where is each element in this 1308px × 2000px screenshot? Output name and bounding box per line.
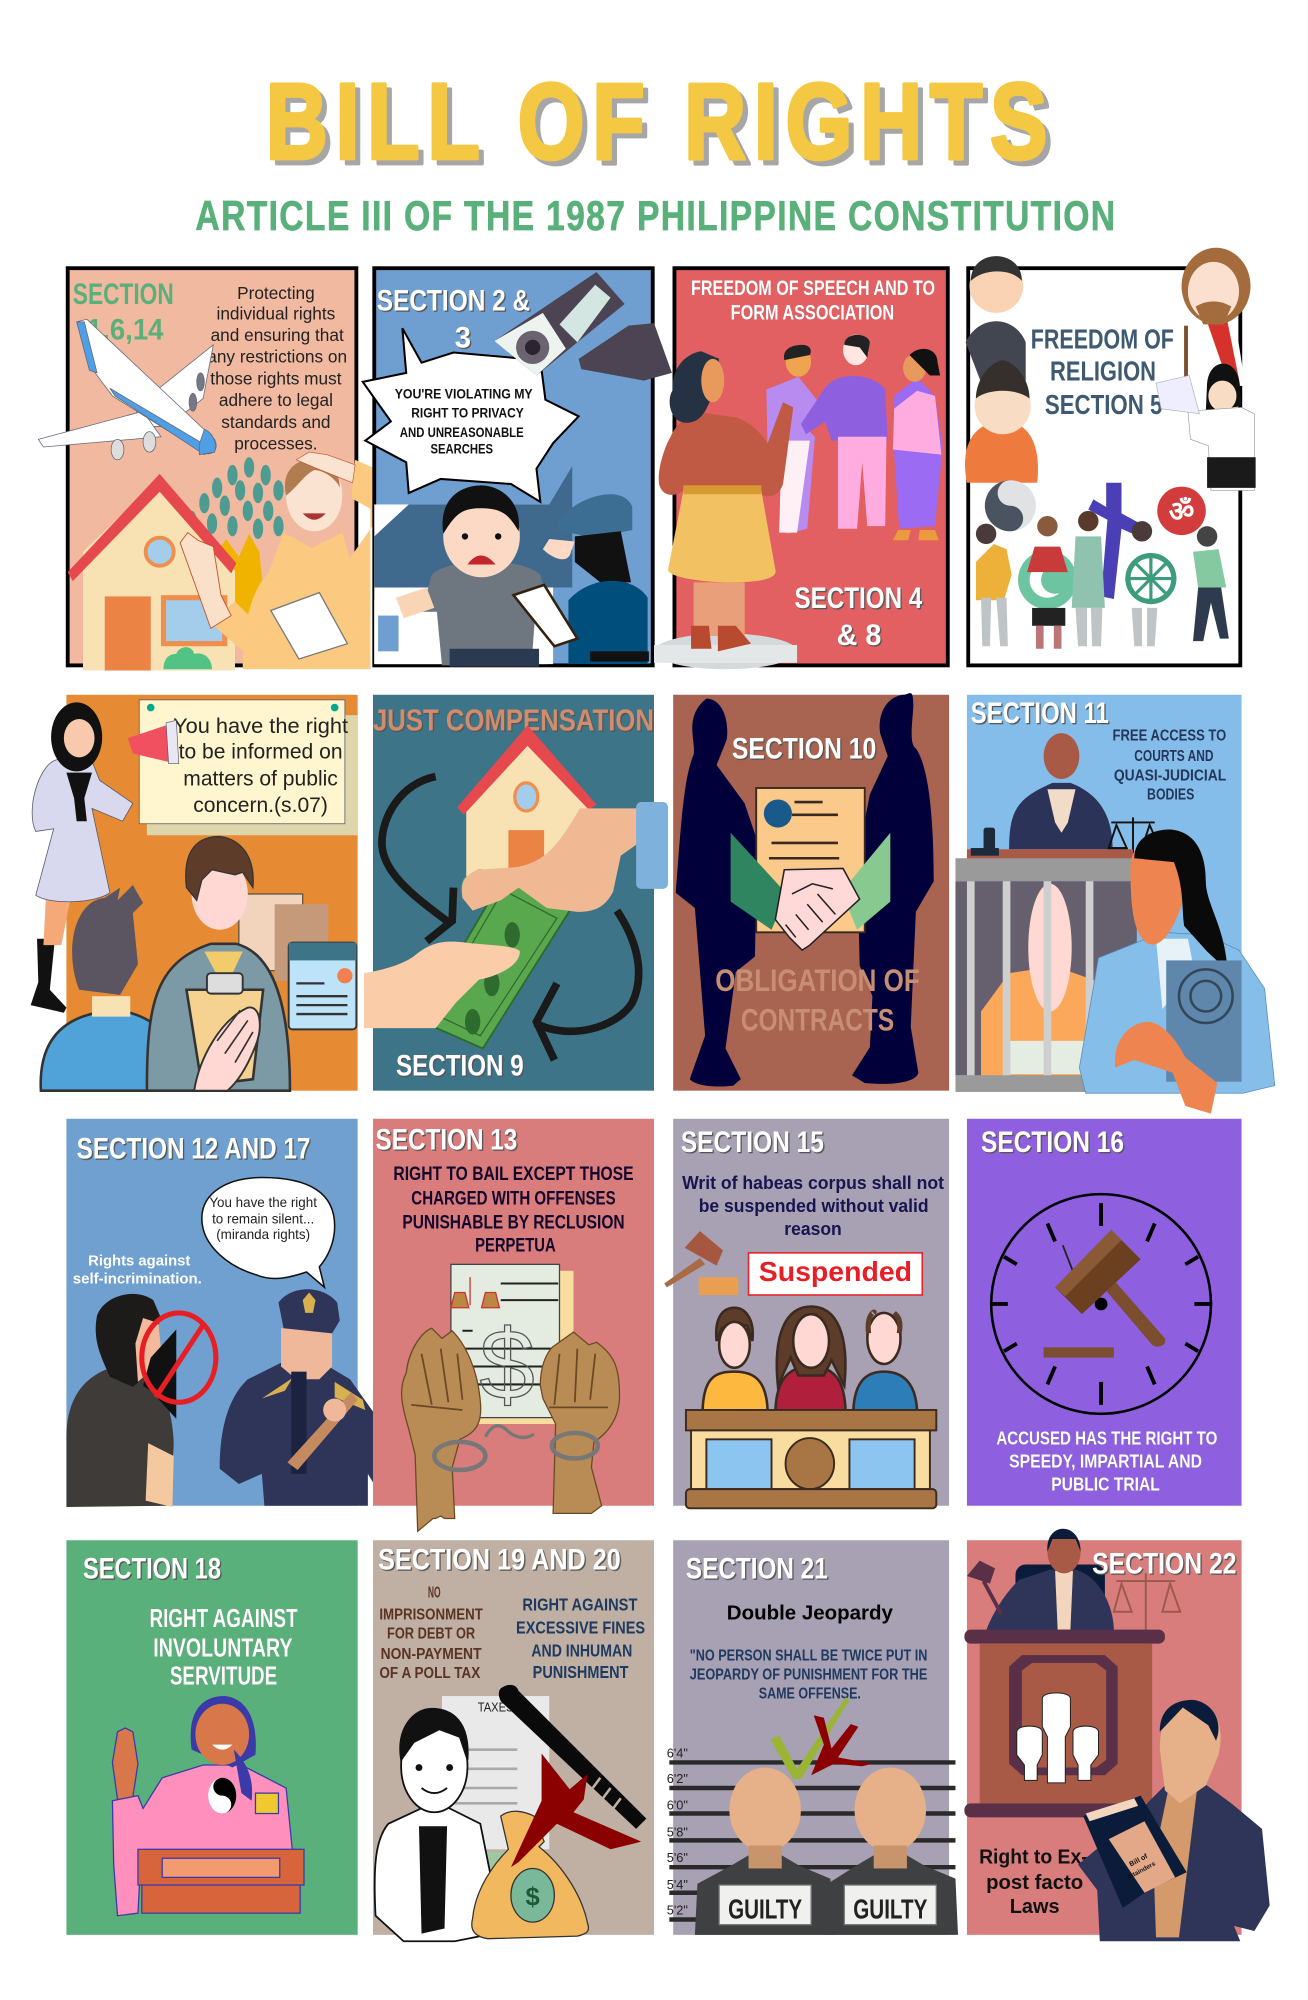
figure: judge <box>967 1529 1114 1631</box>
callout text: (miranda rights) <box>216 1227 310 1242</box>
icon: scales <box>1114 1573 1180 1650</box>
speech text: YOU'RE VIOLATING MY <box>395 385 533 401</box>
icon: tree with leaves <box>181 457 284 641</box>
figure: lawyer with book: Attainders <box>1126 1860 1157 1881</box>
heading: section 4 & 8: & 8 <box>837 619 881 652</box>
heading: double jeopardy: Double Jeopardy <box>727 1602 893 1624</box>
text: accused has the right: PUBLIC TRIAL <box>1051 1473 1160 1494</box>
text: no imprisonment for debt: NON-PAYMENT <box>381 1646 482 1663</box>
text: writ of habeas corpus <box>682 1172 944 1239</box>
panel: sections 2 and 3 <box>363 268 672 667</box>
text: no imprisonment for debt: OF A POLL TAX <box>379 1665 481 1682</box>
silhouette left <box>676 699 757 1087</box>
text: writ of habeas corpus: Writ of habeas corpus shall not <box>682 1172 944 1193</box>
height labels: 5'8" <box>667 1825 688 1840</box>
label: suspended: Suspended <box>759 1256 912 1287</box>
text: protecting individual rights: individual rights <box>217 303 335 323</box>
panel: section 15 <box>664 1119 949 1508</box>
text: right against involuntary servitude: RIGHT AGAINST <box>149 1605 298 1633</box>
figure: lawyer with book <box>1079 830 1275 1114</box>
icons: religious symbols <box>985 480 1206 609</box>
heading: obligation of contracts: OBLIGATION OF <box>715 962 920 998</box>
heading: just compensation: JUST COMPENSATION <box>373 704 654 738</box>
icon: no speaking <box>142 1313 216 1419</box>
icon: circular arrows <box>382 777 639 1060</box>
figure: guilty person left: GUILTY <box>728 1893 802 1924</box>
height labels: 6'0" <box>667 1798 688 1813</box>
heading: section 2 & 3 <box>377 284 530 354</box>
text: right to bail: RIGHT TO BAIL EXCEPT THOSE <box>393 1164 634 1185</box>
panel: section 18 <box>66 1540 358 1935</box>
figure: guilty person right <box>825 1768 958 1935</box>
text: right to ex-post facto laws: post facto <box>986 1872 1083 1894</box>
heading: section 13: SECTION 13 <box>376 1123 517 1156</box>
figure: woman speaking on pedestal <box>654 351 797 669</box>
text: right against excessive fines: RIGHT AGAINST <box>522 1594 637 1614</box>
text: right against involuntary servitude: INVOLUNTARY <box>153 1634 293 1662</box>
icon: house <box>457 725 597 894</box>
figure: priest <box>1156 364 1256 490</box>
text: right to ex-post facto laws: Laws <box>1010 1896 1060 1918</box>
speech text <box>395 385 533 456</box>
callout: miranda rights <box>202 1178 335 1287</box>
heading: obligation of contracts <box>715 962 920 1038</box>
figure: office worker <box>147 837 328 1091</box>
text: writ of habeas corpus: reason <box>784 1218 842 1239</box>
icon: red x <box>511 1754 641 1867</box>
text: rights against self-incrimination: self-incrimination. <box>73 1272 202 1288</box>
figure: man with papers <box>180 452 378 669</box>
callout text <box>209 1195 317 1242</box>
note text: You have the right <box>173 715 348 738</box>
text: right to bail <box>393 1164 634 1257</box>
icon: handcuffed fists <box>402 1328 620 1531</box>
hand: buyer <box>364 942 520 1028</box>
text: no imprisonment for debt: NO <box>428 1585 441 1602</box>
panel: section 21 <box>667 1540 958 1935</box>
speech text: RIGHT TO PRIVACY <box>411 405 524 421</box>
icon: clock <box>990 1194 1212 1414</box>
panel: sections 4 and 8 <box>654 268 948 669</box>
panel: sections 19 and 20 <box>373 1540 654 1941</box>
panel: section 10 <box>673 693 949 1091</box>
icon: gavel <box>971 828 999 856</box>
group: three people talking <box>766 335 943 540</box>
podium <box>138 1849 304 1913</box>
speech burst <box>363 328 579 502</box>
note card <box>139 700 358 835</box>
height labels: 5'4" <box>667 1877 688 1892</box>
title: BILL OF RIGHTS <box>271 66 1053 187</box>
jail cell <box>955 849 1137 1092</box>
height labels: 5'6" <box>667 1850 688 1865</box>
figure: guilty person right: GUILTY <box>853 1893 928 1924</box>
height labels <box>667 1745 688 1917</box>
heading: section 19 and 20: SECTION 19 AND 20 <box>378 1544 621 1577</box>
bench <box>964 1630 1165 1817</box>
text: free access to courts: BODIES <box>1147 786 1195 803</box>
icons: religious symbols: ॐ <box>1169 496 1194 527</box>
heading: section 2 & 3: SECTION 2 & <box>377 284 530 317</box>
panel: section 13 <box>373 1119 654 1531</box>
text: right to bail: CHARGED WITH OFFENSES <box>411 1188 616 1209</box>
title: BILL OF RIGHTS <box>266 61 1047 182</box>
heading: section 16: SECTION 16 <box>981 1126 1124 1159</box>
text: right against involuntary servitude: SERVITUDE <box>170 1663 277 1691</box>
heading: section 18: SECTION 18 <box>83 1553 221 1586</box>
icon: document with dollar <box>451 1264 574 1424</box>
heading: section 21: SECTION 21 <box>686 1553 828 1586</box>
note text: to be informed on <box>179 741 343 764</box>
silhouette right <box>852 693 934 1084</box>
icon: security camera <box>494 272 672 381</box>
group: five people holding symbols <box>976 511 1229 649</box>
text: protecting individual rights: standards and <box>221 412 331 432</box>
heading: freedom of speech: FORM ASSOCIATION <box>731 299 894 324</box>
subtitle: ARTICLE III OF THE 1987 PHILIPPINE CONSTITUTION <box>195 192 1115 240</box>
panel: freedom of religion <box>965 248 1256 665</box>
heading: section 4 & 8 <box>795 582 923 652</box>
text: writ of habeas corpus: be suspended without valid <box>699 1195 929 1216</box>
height labels: 6'4" <box>667 1745 688 1760</box>
heading: freedom of religion section 5: FREEDOM OF <box>1031 324 1174 355</box>
heading: obligation of contracts: CONTRACTS <box>741 1002 894 1038</box>
icon: money bag: $ <box>526 1883 540 1911</box>
icon: house <box>68 474 236 670</box>
text: right to bail: PERPETUA <box>475 1236 556 1257</box>
house background <box>374 466 572 664</box>
figure: judge <box>1009 733 1113 849</box>
hand: seller with cuff <box>462 802 668 912</box>
text: no imprisonment for debt: IMPRISONMENT <box>379 1606 483 1623</box>
icon: taxes paper <box>441 1696 549 1890</box>
icon: check and x marks <box>770 1697 872 1779</box>
figure: police officer with clipboard <box>513 494 649 664</box>
height chart lines <box>667 1745 955 1920</box>
icon: baton <box>499 1685 646 1829</box>
icon: raised fists <box>1017 1693 1099 1783</box>
text: no person shall: SAME OFFENSE. <box>759 1686 861 1703</box>
figure: lawyer with book <box>1078 1700 1270 1941</box>
text: right against excessive fines: AND INHUMAN <box>531 1640 632 1660</box>
icon: gavel <box>1044 1230 1165 1358</box>
figure: guilty person left <box>695 1768 835 1935</box>
heading: freedom of religion section 5: SECTION 5 <box>1045 389 1162 420</box>
icon: gavel <box>664 1231 738 1295</box>
text: protecting individual rights: any restrictions on <box>207 347 347 367</box>
note text: concern.(s.07) <box>193 794 328 817</box>
text: protecting individual rights: adhere to legal <box>219 390 333 410</box>
text: accused has the right: ACCUSED HAS THE RIGHT TO <box>996 1427 1217 1448</box>
text: right to bail: PUNISHABLE BY RECLUSION <box>402 1213 625 1234</box>
panel: sections 12 and 17 <box>66 1119 393 1507</box>
text: protecting individual rights <box>207 283 347 454</box>
heading: section 10: SECTION 10 <box>732 733 876 766</box>
callout text: You have the right <box>209 1195 317 1210</box>
figure: girl with megaphone <box>31 702 179 1013</box>
height labels: 6'2" <box>667 1771 688 1786</box>
panel: section 7 <box>31 695 358 1091</box>
panel: section 11 <box>955 695 1275 1114</box>
text: right against excessive fines <box>516 1594 645 1682</box>
speech text: AND UNREASONABLE <box>400 424 524 440</box>
heading: freedom of speech: FREEDOM OF SPEECH AND TO <box>691 275 935 300</box>
icon: money bag <box>472 1811 588 1939</box>
heading: section 9: SECTION 9 <box>396 1049 524 1082</box>
text: rights against self-incrimination <box>73 1254 202 1288</box>
text: protecting individual rights: Protecting <box>237 283 315 303</box>
text: free access to courts <box>1113 728 1226 803</box>
text: right against excessive fines: EXCESSIVE FINES <box>516 1617 645 1637</box>
speech text: SEARCHES <box>430 440 493 456</box>
figure: monk <box>966 256 1026 393</box>
figure: police officer with baton <box>220 1289 393 1506</box>
label: suspended <box>749 1253 922 1295</box>
text: free access to courts: FREE ACCESS TO <box>1113 728 1226 745</box>
text: no person shall: JEOPARDY OF PUNISHMENT FOR THE <box>690 1666 928 1683</box>
document <box>756 788 865 932</box>
text: right to ex-post facto laws <box>979 1846 1088 1918</box>
figure: jesus <box>1182 248 1251 388</box>
panel: section 22 <box>964 1529 1270 1941</box>
figure: person taking oath <box>112 1696 294 1916</box>
icon: handshake with cuffs <box>731 833 890 950</box>
figure: man in white shirt <box>375 1709 493 1941</box>
icon: money bill <box>419 877 570 1049</box>
heading: section 1,6,14: 1,6,14 <box>87 314 164 347</box>
heading: section 11: SECTION 11 <box>971 697 1109 730</box>
clipboard and hand <box>186 973 263 1091</box>
heading: section 1,6,14 <box>73 278 174 347</box>
panel: section 9 <box>364 695 668 1091</box>
text: no person shall <box>690 1647 928 1703</box>
text: protecting individual rights: those rights must <box>210 368 342 388</box>
callout text: to remain silent... <box>212 1212 314 1226</box>
figure: man seen from back <box>41 885 176 1091</box>
icon: scales <box>1109 817 1160 862</box>
heading: freedom of religion section 5 <box>1031 324 1174 420</box>
text: accused has the right: SPEEDY, IMPARTIAL AND <box>1009 1450 1202 1471</box>
desk <box>686 1410 936 1508</box>
text: no imprisonment for debt: FOR DEBT OR <box>387 1626 476 1643</box>
text: free access to courts: QUASI-JUDICIAL <box>1114 767 1226 784</box>
icon: browser window <box>289 943 356 1029</box>
heading: freedom of religion section 5: RELIGION <box>1050 356 1156 387</box>
panel: sections 1, 6, 14 <box>38 268 378 670</box>
group: three judges <box>703 1307 917 1415</box>
heading: freedom of speech <box>691 275 935 324</box>
heading: section 15: SECTION 15 <box>681 1126 824 1159</box>
heading: section 4 & 8: SECTION 4 <box>795 582 923 615</box>
text: accused has the right <box>996 1427 1217 1494</box>
text: right to ex-post facto laws: Right to Ex- <box>979 1846 1088 1868</box>
figure: upset man <box>396 485 548 667</box>
figure: buddha <box>965 360 1038 483</box>
icon: taxes paper: TAXES <box>478 1699 513 1714</box>
text: right against excessive fines: PUNISHMENT <box>533 1662 629 1682</box>
heading: section 12 and 17: SECTION 12 AND 17 <box>77 1132 310 1165</box>
icon: document with dollar: $ <box>479 1309 535 1420</box>
figure: man silent <box>66 1294 174 1507</box>
heading: section 22: SECTION 22 <box>1092 1547 1236 1580</box>
text: protecting individual rights: processes. <box>234 434 318 454</box>
text: no imprisonment for debt <box>379 1585 483 1682</box>
heading: section 1,6,14: SECTION <box>73 278 174 311</box>
text: protecting individual rights: and ensuring that <box>211 325 344 345</box>
icon: airplane <box>38 319 216 460</box>
heading: section 2 & 3: 3 <box>455 321 471 354</box>
height labels: 5'2" <box>667 1902 688 1917</box>
panel: section 16 <box>967 1119 1242 1506</box>
text: right against involuntary servitude <box>149 1605 298 1691</box>
text: free access to courts: COURTS AND <box>1134 748 1213 765</box>
text: rights against self-incrimination: Rights against <box>88 1254 190 1270</box>
note text: matters of public <box>183 767 338 790</box>
note text <box>173 715 348 817</box>
figure: lawyer with book: Bill of <box>1128 1853 1150 1868</box>
text: no person shall: "NO PERSON SHALL BE TWICE PUT IN <box>690 1647 927 1664</box>
